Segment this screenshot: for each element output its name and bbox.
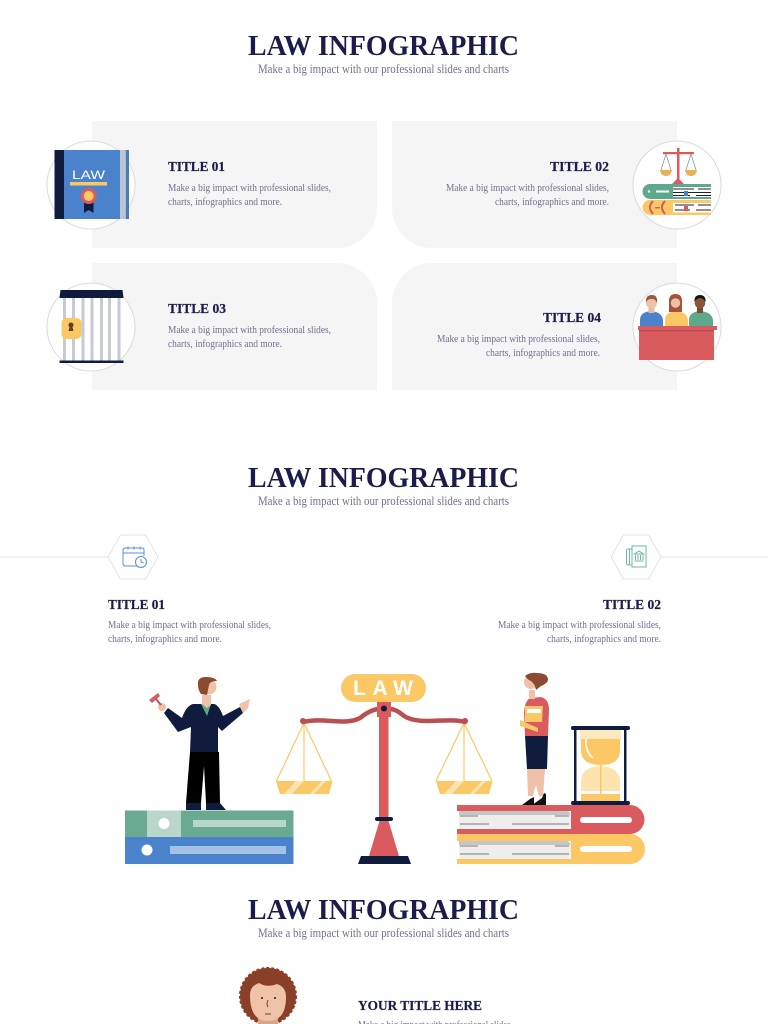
panel: title 04 card <box>392 263 677 390</box>
icon: law book <box>47 141 135 229</box>
text block: title 01: charts, infographics and more. <box>108 634 222 645</box>
illustration: red and yellow books <box>457 805 645 864</box>
scale law label <box>341 674 426 702</box>
illustration: woman with folder <box>520 673 549 805</box>
icon: jury behind desk <box>633 283 721 371</box>
text block: title 02: Make a big impact with professional slides, <box>498 620 661 631</box>
heading: section two: Make a big impact with our professional slides and charts <box>258 493 509 508</box>
text block: title 01 <box>108 597 271 645</box>
illustration: law scale <box>276 674 492 864</box>
text block: your title here: YOUR TITLE HERE <box>358 998 482 1013</box>
heading: section one: LAW INFOGRAPHIC <box>248 30 519 62</box>
icon: scales on books <box>633 141 721 229</box>
heading: section two: LAW INFOGRAPHIC <box>248 462 519 494</box>
heading: section three <box>248 894 519 940</box>
heading: section three: Make a big impact with our professional slides and charts <box>258 925 509 940</box>
text block: title 01: Make a big impact with professional slides, <box>108 620 271 631</box>
panel: title 04 card: TITLE 04 <box>543 310 601 325</box>
panel: title 02 card: Make a big impact with professional slides, <box>446 183 609 194</box>
scale left pan <box>276 723 332 794</box>
portrait: curly haired person <box>240 968 296 1024</box>
text block: your title here <box>358 998 513 1024</box>
text block: title 02: charts, infographics and more. <box>547 634 661 645</box>
text block: title 02 <box>498 597 661 645</box>
icon: law book: LAW <box>72 168 106 182</box>
panel: title 01 card <box>92 121 377 248</box>
heading: section two <box>248 462 519 508</box>
illustration: man with gavel <box>149 677 250 810</box>
panel: title 02 card: charts, infographics and more. <box>495 197 609 208</box>
text block: title 02: TITLE 02 <box>603 597 661 612</box>
heading: section one <box>248 30 519 76</box>
panel: title 01 card: charts, infographics and more. <box>168 197 282 208</box>
scale law label: LAW <box>353 677 413 700</box>
panel: title 04 card: Make a big impact with professional slides, <box>437 334 600 345</box>
text block: title 01: TITLE 01 <box>108 597 165 612</box>
panel: title 03 card: charts, infographics and more. <box>168 339 282 350</box>
panel: title 03 card <box>92 263 377 390</box>
panel: title 04 card: charts, infographics and more. <box>486 348 600 359</box>
icon: document hexagon <box>611 535 768 579</box>
icon: calendar clock hexagon <box>0 535 158 579</box>
heading: section one: Make a big impact with our professional slides and charts <box>258 61 509 76</box>
illustration: hourglass <box>571 726 630 805</box>
heading: section three: LAW INFOGRAPHIC <box>248 894 519 926</box>
panel: title 01 card: TITLE 01 <box>168 159 225 174</box>
panel: title 03 card: Make a big impact with professional slides, <box>168 325 331 336</box>
panel: title 03 card: TITLE 03 <box>168 301 226 316</box>
panel: title 01 card: Make a big impact with professional slides, <box>168 183 331 194</box>
icon: jail bars <box>47 283 135 371</box>
illustration: green and blue books <box>125 810 294 864</box>
scale right pan <box>436 723 492 794</box>
panel: title 02 card <box>392 121 677 248</box>
panel: title 02 card: TITLE 02 <box>550 159 609 174</box>
